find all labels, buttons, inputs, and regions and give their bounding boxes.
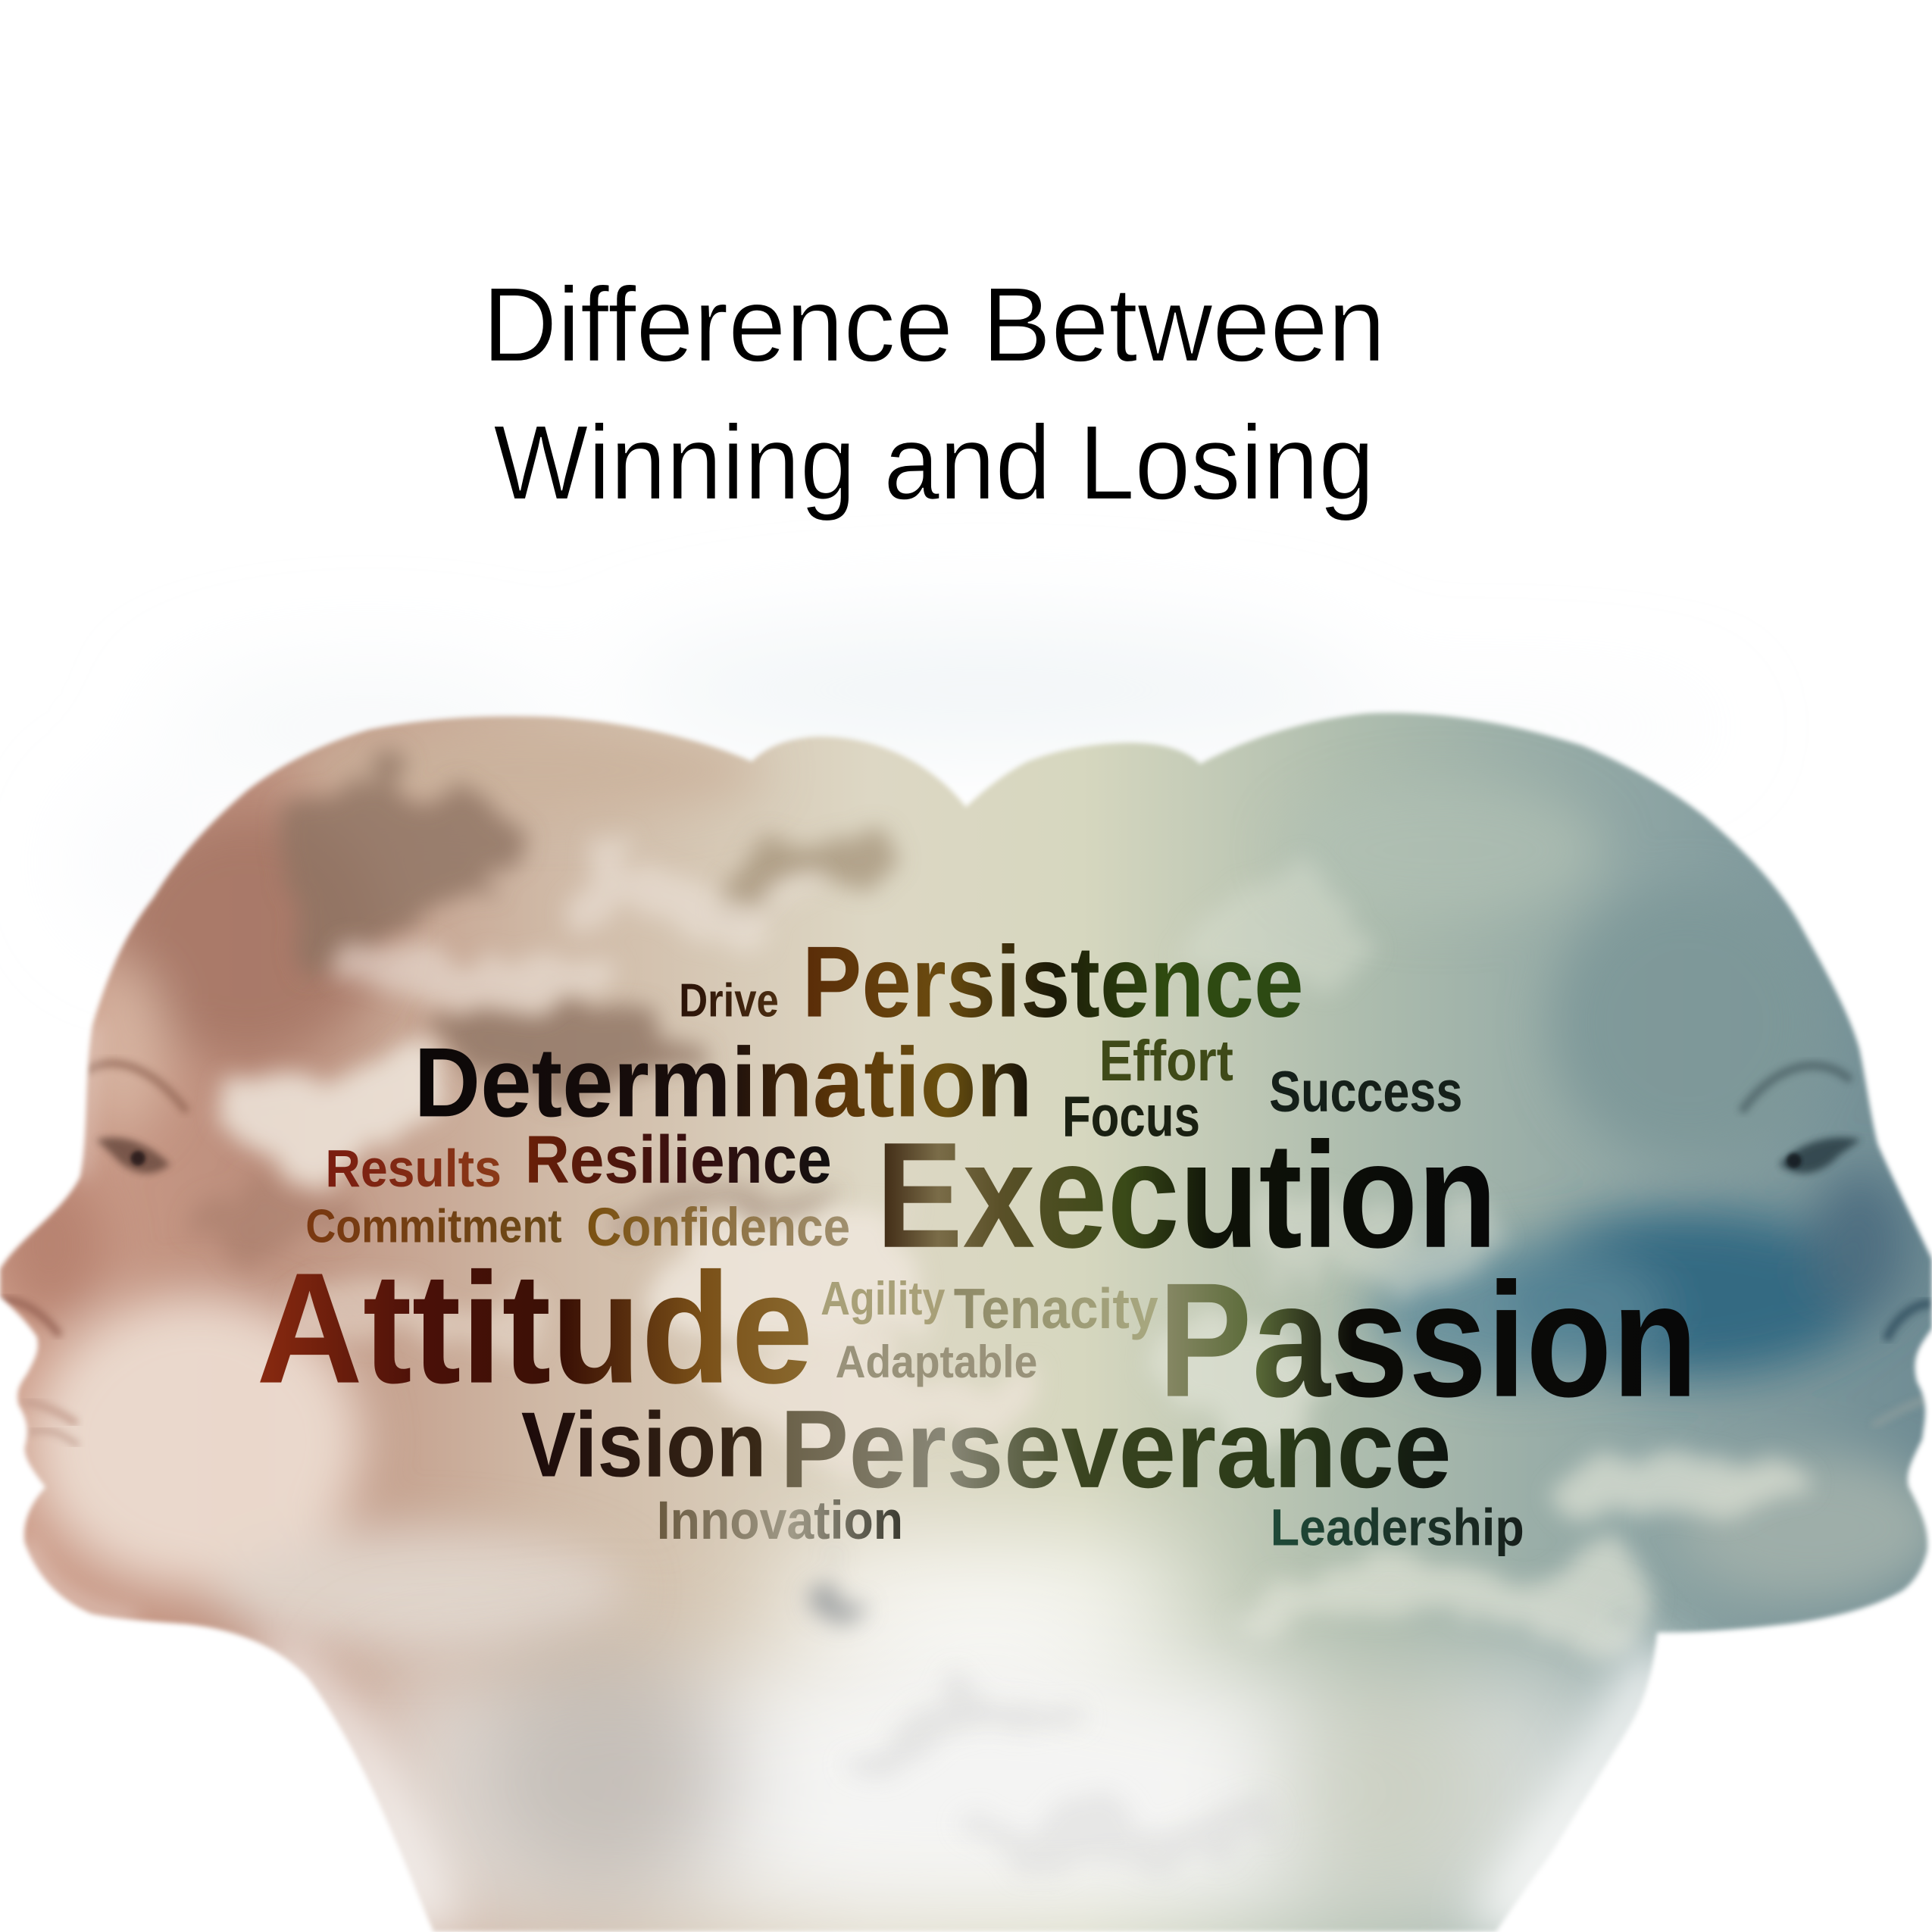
word cloud: Commitment	[305, 1200, 562, 1252]
left light cloud billows	[216, 864, 1023, 1442]
right face features	[1743, 1065, 1930, 1424]
word cloud: Innovation	[657, 1490, 903, 1551]
faint sky behind heads	[74, 628, 1725, 936]
word cloud: Focus	[1062, 1084, 1200, 1149]
word cloud: Vision	[521, 1393, 767, 1496]
word cloud: Drive	[679, 975, 779, 1027]
word cloud: Confidence	[586, 1197, 850, 1258]
word cloud: Results	[325, 1139, 502, 1198]
word cloud: Passion	[1158, 1250, 1698, 1431]
word cloud: Success	[1269, 1060, 1462, 1124]
word cloud: Adaptable	[836, 1336, 1037, 1387]
word cloud	[256, 926, 1698, 1556]
left dark cloud patches	[191, 780, 893, 1247]
left face features	[0, 1063, 185, 1444]
left head shading	[0, 727, 764, 1651]
word cloud: Effort	[1099, 1029, 1233, 1093]
right head shading	[1281, 783, 1932, 1602]
title: Difference Between	[483, 264, 1386, 383]
double-profile heads with clouds	[0, 710, 1932, 1932]
neck and lower cloud fade	[370, 1545, 1602, 1932]
word cloud: Execution	[876, 1111, 1497, 1280]
word cloud: Leadership	[1271, 1499, 1524, 1556]
word cloud: Tenacity	[954, 1277, 1158, 1340]
word cloud: Resilience	[525, 1121, 832, 1197]
right cloud billows	[1152, 895, 1812, 1643]
word cloud: Agility	[821, 1273, 946, 1325]
word cloud: Perseverance	[780, 1388, 1452, 1512]
word cloud: Persistence	[802, 926, 1304, 1039]
word cloud: Determination	[414, 1027, 1033, 1137]
title: Winning and Losing	[493, 403, 1374, 522]
word cloud: Attitude	[256, 1241, 813, 1417]
title	[483, 264, 1386, 522]
